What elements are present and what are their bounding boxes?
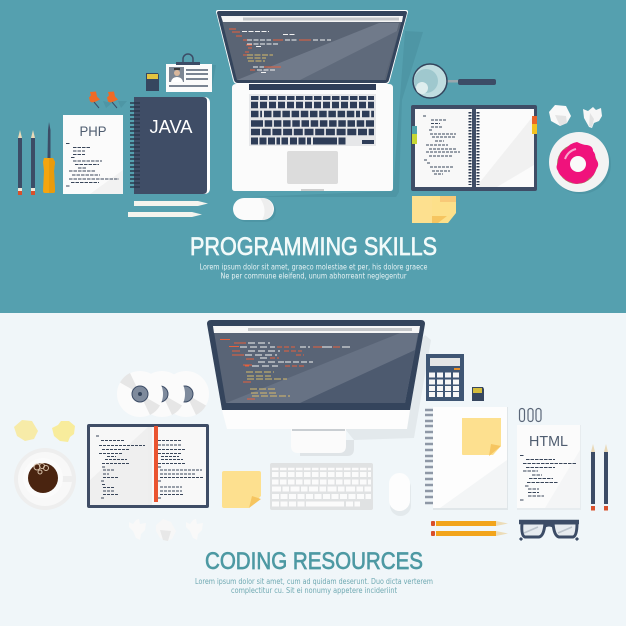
icon: small SD card bbox=[472, 387, 484, 401]
heading: coding resources: CODING RESOURCES bbox=[205, 548, 423, 575]
JAVA notebook: JAVA bbox=[150, 117, 192, 137]
icon: dark pencils bbox=[591, 444, 608, 510]
open notebook bbox=[411, 105, 537, 191]
icon: mouse bbox=[233, 198, 276, 222]
icon: glasses bbox=[519, 522, 579, 540]
icon: white mouse bbox=[389, 473, 411, 516]
laptop screen code bbox=[229, 29, 331, 72]
text: coding subtitle: Lorem ipsum dolor sit amet, cum ad quidam deserunt. Duo dicta verterem bbox=[195, 577, 433, 586]
icon: orange pencils bbox=[431, 521, 508, 536]
PHP document bbox=[63, 115, 123, 194]
PHP document: PHP bbox=[80, 123, 106, 139]
open book bbox=[87, 424, 209, 508]
laptop bbox=[216, 10, 423, 197]
icon: paper clips bbox=[520, 408, 541, 422]
icon: push pins bbox=[89, 92, 127, 108]
panel: coding resources background bbox=[0, 313, 626, 626]
icon: donut on plate bbox=[549, 132, 611, 194]
monitor screen code bbox=[220, 340, 350, 399]
text: programming subtitle: Lorem ipsum dolor sit amet, graeco molestiae et per, his dolore graece bbox=[200, 262, 428, 272]
wireless keyboard bbox=[270, 463, 373, 510]
laptop keyboard keys bbox=[251, 98, 374, 142]
icon: screwdriver bbox=[43, 122, 55, 193]
panel: programming skills background bbox=[0, 0, 626, 313]
icon: crumpled yellow paper bbox=[14, 420, 75, 442]
HTML document: HTML bbox=[529, 434, 568, 450]
laptop trackpad bbox=[287, 151, 338, 184]
text: programming subtitle bbox=[200, 262, 428, 280]
icon: sticky notes bbox=[412, 196, 456, 223]
text: coding subtitle bbox=[195, 577, 433, 595]
ID badge bbox=[166, 54, 216, 92]
icon: CD discs bbox=[117, 371, 209, 417]
icon: crumpled paper balls bbox=[549, 105, 602, 128]
spiral notepad bbox=[425, 407, 508, 510]
icon: pencils bbox=[18, 130, 35, 195]
icon: SD card bbox=[146, 73, 159, 91]
icon: crumpled white paper bbox=[129, 519, 203, 541]
icon: magnifying glass bbox=[413, 64, 496, 98]
icon: yellow sticky note bbox=[222, 471, 261, 508]
desktop monitor bbox=[207, 320, 431, 456]
icon: white pencils bbox=[128, 201, 208, 217]
HTML document bbox=[517, 425, 581, 510]
icon: coffee cup bbox=[14, 448, 76, 510]
text: programming subtitle: Ne per commune eleifend, unum abhorreant neglegentur bbox=[220, 272, 407, 280]
JAVA notebook bbox=[130, 97, 210, 194]
heading: programming skills: PROGRAMMING SKILLS bbox=[190, 233, 437, 261]
text: coding subtitle: complectitur cu. Sit ei nonumy appetere incideriint bbox=[231, 586, 397, 595]
icon: calculator bbox=[426, 354, 464, 401]
